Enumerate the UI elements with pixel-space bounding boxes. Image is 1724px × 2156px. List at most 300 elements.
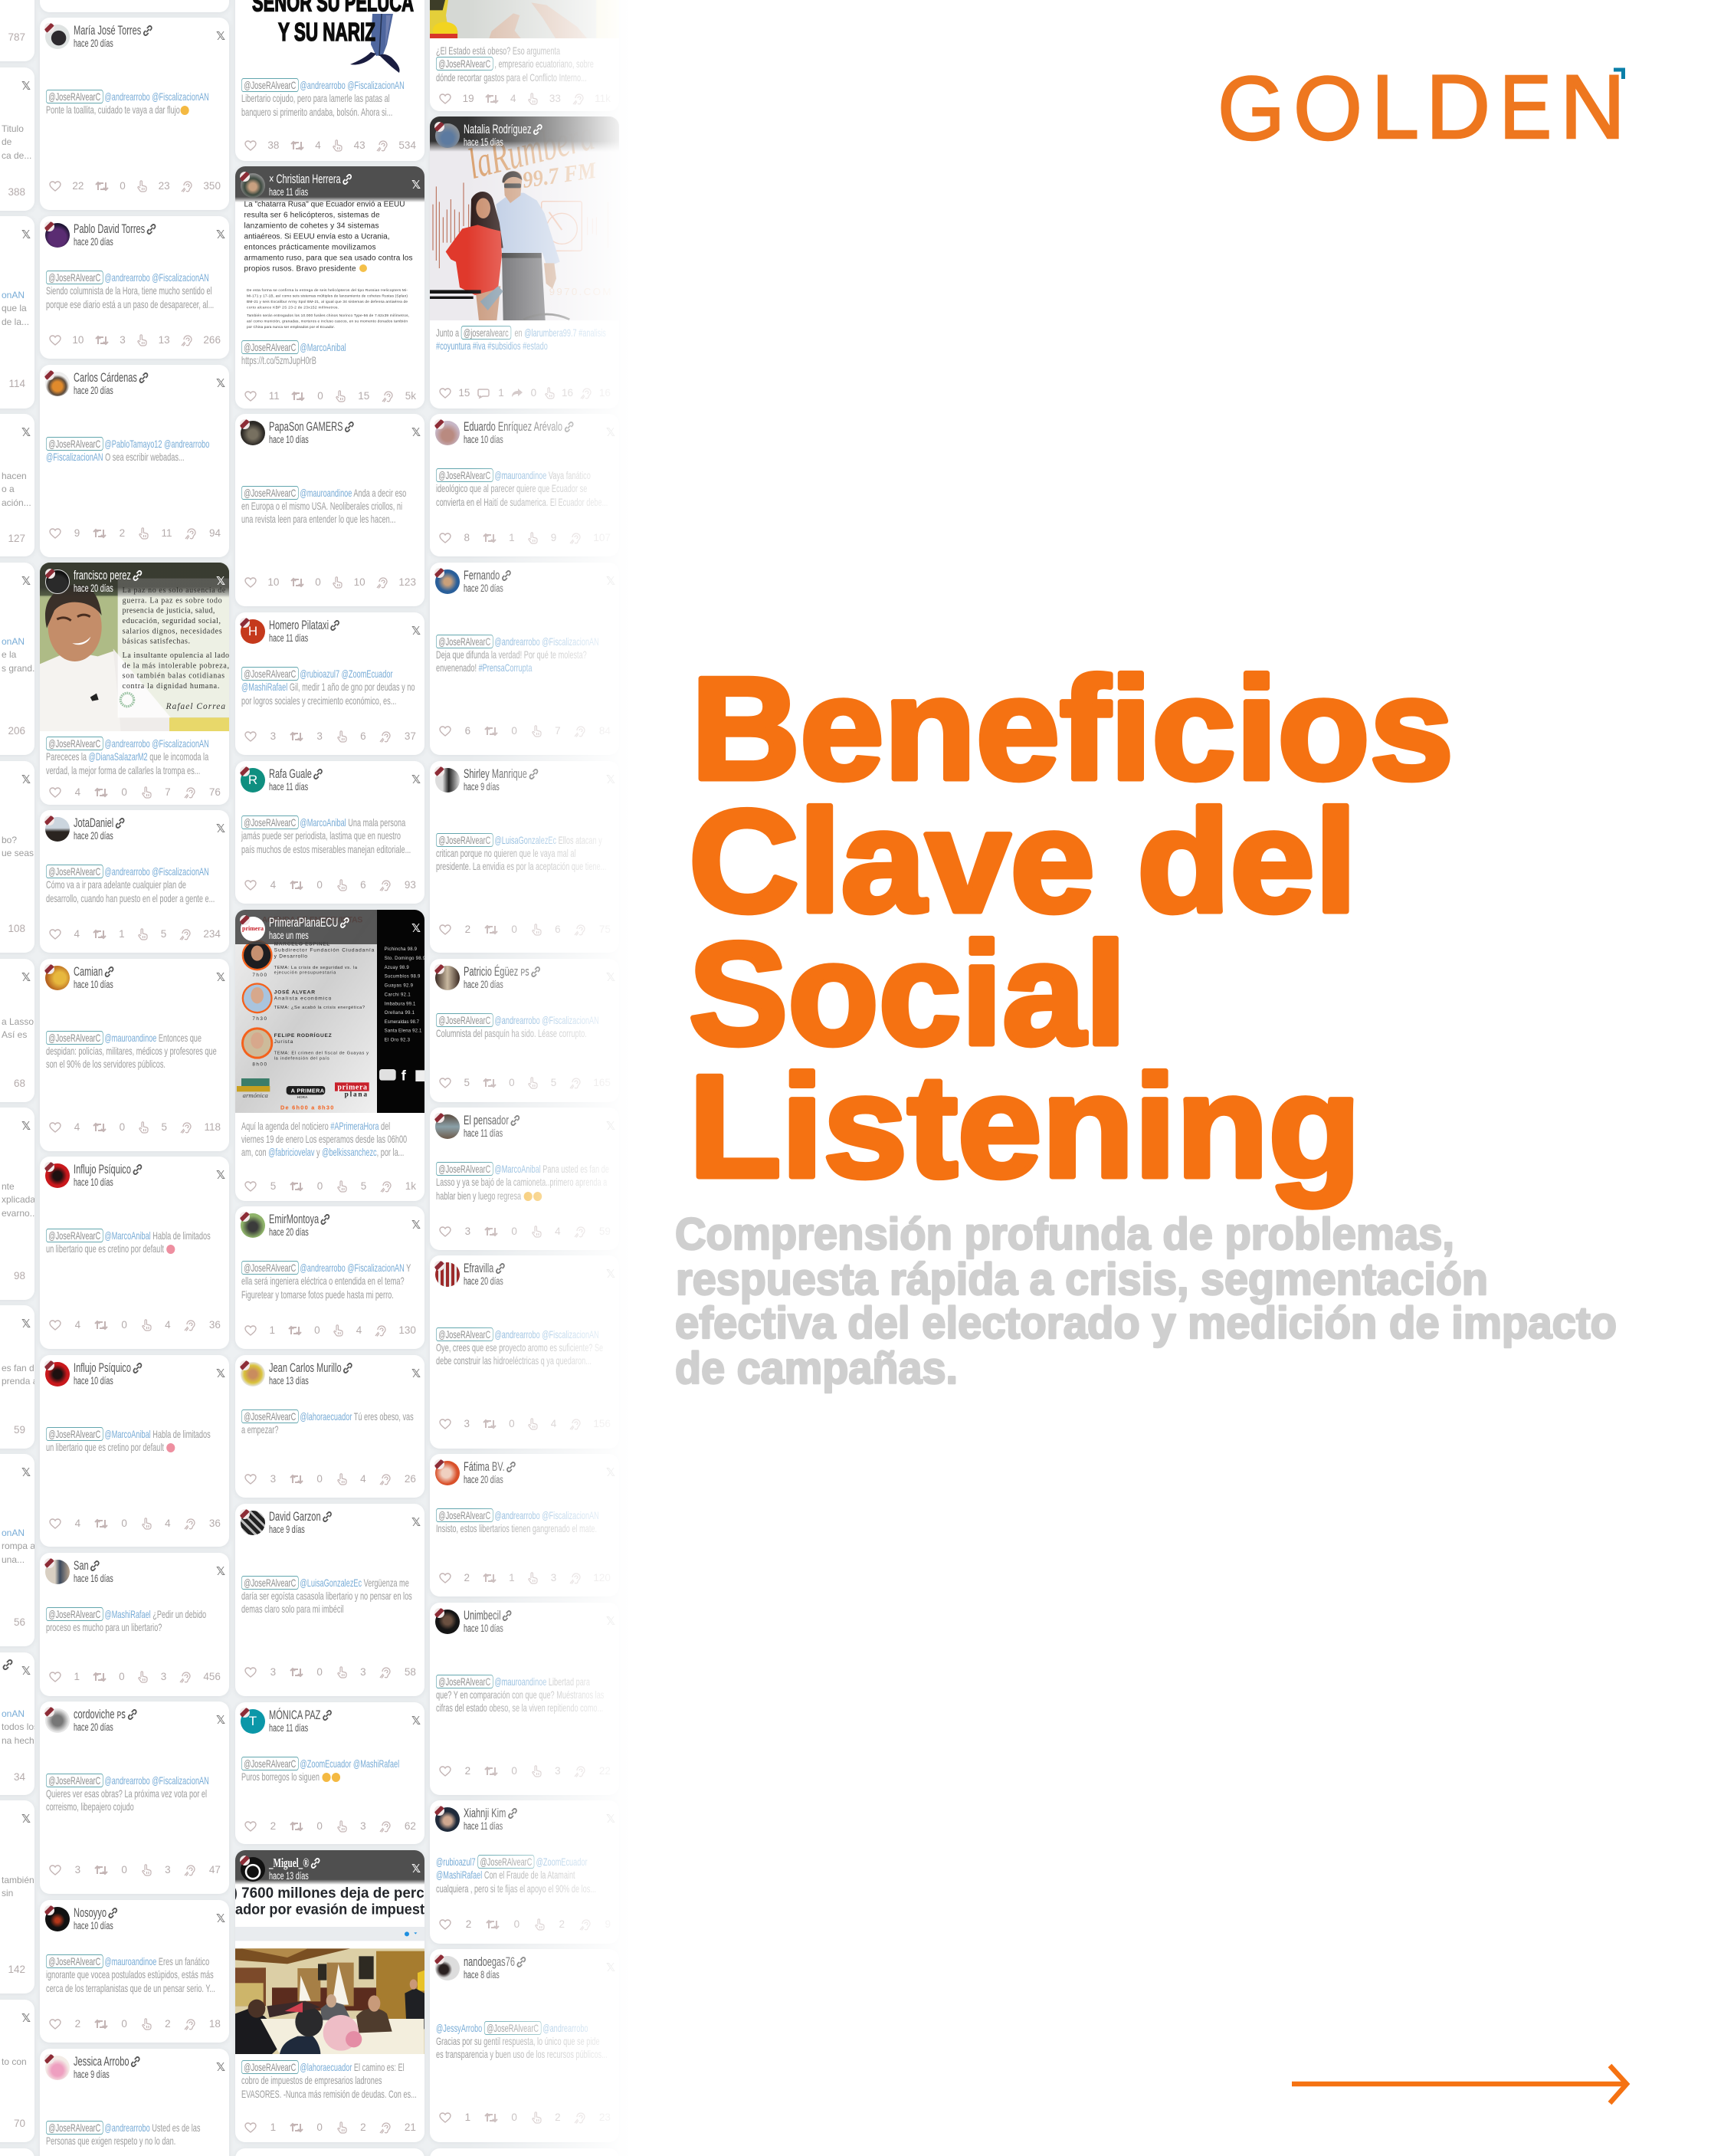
- tweet text: cobro de impuestos de empresarios ladrones: [241, 2074, 382, 2086]
- tweet text: @MashiRafael Gil, medir 1 año de gno por deudas y no: [241, 681, 415, 693]
- engagement stats: 22: [599, 1765, 611, 1777]
- tweet: Pablo David Torres: [40, 216, 229, 359]
- avatar: [435, 1610, 460, 1634]
- avatar: [45, 569, 70, 594]
- screenshot text: Mi-171 y 17-1B, así como seis sistemas múltiples de lanzamiento de cohetes Rustas (Splan): [247, 294, 408, 299]
- column A card: cropped tweet 127: [0, 414, 34, 556]
- X icon: 𝕏: [606, 1465, 615, 1479]
- tweet text: banquero si primerito andaba, bolsón. Ahora si...: [241, 106, 392, 118]
- author: [74, 569, 143, 594]
- engagement stats: 2: [466, 1918, 471, 1930]
- column A card: cropped tweet 787: 787: [8, 31, 25, 43]
- engagement stats: 11: [162, 527, 172, 539]
- avatar: [45, 1708, 70, 1733]
- engagement stats: 5: [270, 1180, 276, 1191]
- engagement stats: [439, 1077, 611, 1089]
- author: hace 10 días: [464, 1623, 503, 1634]
- author: hace 20 días: [269, 1226, 309, 1238]
- engagement stats: [49, 1319, 221, 1331]
- X icon: 𝕏: [216, 1564, 225, 1578]
- column A card: cropped tweet 206: 𝕏: [21, 574, 31, 588]
- tweet text: convierta en el Haití de sudamerica. El Ecuador debe...: [435, 496, 608, 508]
- agenda poster: [235, 909, 424, 1113]
- author: Carlos Cárdenas: [74, 371, 137, 385]
- X icon: 𝕏: [411, 1714, 421, 1728]
- tweet text: @FiscalizacionAN O sea escribir webadas...: [46, 451, 184, 463]
- engagement stats: 22: [72, 180, 84, 192]
- tweet text: desarrollo, cuando han puesto en el poder a gente e...: [46, 892, 215, 904]
- engagement stats: 36: [209, 1319, 221, 1331]
- engagement stats: 3: [120, 334, 126, 346]
- author: EmirMontoya: [269, 1213, 319, 1226]
- tweet text: @JoseRAlvearC @mauroandinoe Libertad para: [438, 1675, 589, 1688]
- engagement stats: [244, 2122, 416, 2134]
- X icon: 𝕏: [411, 773, 421, 786]
- author: JotaDaniel: [74, 816, 113, 830]
- tweet: EmirMontoya: [235, 1206, 424, 1349]
- agenda poster: MARCELO ESPINEL: [274, 941, 329, 947]
- tweet text: es transparencia y buen uso de los recursos públicos...: [435, 2048, 607, 2060]
- avatar: [435, 768, 460, 793]
- agenda poster: A PRIMERA: [291, 1087, 325, 1094]
- engagement stats: 1: [498, 387, 504, 399]
- video still: [430, 0, 619, 38]
- tweet text: Ponte la toallita, cuidado te vaya a dar flujo: [46, 103, 179, 116]
- logo: GOLDEN: N: [1560, 57, 1625, 158]
- column A card: cropped tweet 108: bo?: [2, 835, 17, 845]
- logo: GOLDEN: G: [1218, 58, 1285, 159]
- engagement stats: [439, 2112, 611, 2124]
- column A card: cropped tweet 68: 68: [14, 1078, 25, 1089]
- screenshot text: lanzamiento de cohetes y 34 sistemas: [244, 222, 379, 230]
- screenshot text: De esta forma se confirma la entrega de seis helicópteros del tipo Russian Helicopters Mi-: [247, 288, 408, 293]
- tweet with photo: Natalia Rodríguez: [430, 116, 619, 409]
- engagement stats: 11: [269, 390, 280, 402]
- X icon: 𝕏: [606, 1812, 615, 1826]
- tweet text: @JoseRAlvearC @andrearrobo @FiscalizacionAN: [438, 1509, 598, 1521]
- column A card: cropped tweet 68: 𝕏: [21, 970, 31, 984]
- tweet: Jean Carlos Murillo: [235, 1355, 424, 1498]
- column A card: cropped tweet 142: 142: [8, 1964, 25, 1975]
- tweet: Xiahnji Kim: [430, 1800, 619, 1944]
- author: [464, 1955, 526, 1980]
- tweet text: debe construir las hidroeléctricas q ya quedaron...: [435, 1354, 591, 1367]
- tweet text: [435, 1856, 595, 1895]
- author: [464, 569, 511, 594]
- engagement stats: 0: [121, 1864, 127, 1875]
- column A card: cropped tweet 206: e la: [2, 649, 16, 660]
- agenda poster: f: [402, 1067, 407, 1083]
- engagement stats: 94: [209, 527, 221, 539]
- agenda poster: Imbabura 99.1: [385, 1002, 416, 1006]
- tweet text: cifras del estado obeso, se la viven repitiendo como...: [435, 1702, 603, 1714]
- engagement stats: 26: [405, 1473, 416, 1485]
- column A card: cropped tweet 127: 127: [8, 533, 25, 544]
- X icon: 𝕏: [411, 1515, 421, 1529]
- avatar: [241, 1362, 265, 1386]
- column A card: cropped tweet 142: también: [2, 1875, 34, 1885]
- engagement stats: 62: [405, 1820, 416, 1832]
- column A card: cropped tweet 56: 56: [14, 1616, 25, 1628]
- engagement stats: 11k: [595, 93, 611, 104]
- author: hace un mes: [269, 929, 309, 941]
- tweet text: [46, 2121, 201, 2147]
- author: [464, 420, 574, 445]
- tweet text: Columnista del pasquín ha sido. Léase corrupto.: [435, 1027, 586, 1039]
- column A card: cropped tweet 388: [0, 67, 34, 210]
- author: hace 20 días: [74, 830, 113, 842]
- tweet: Fernando: [430, 563, 619, 755]
- column A card: cropped tweet 70: [0, 2000, 34, 2142]
- tweet text: Figuretear y tomarse fotos puede hasta mi perro.: [241, 1288, 393, 1301]
- engagement stats: 4: [74, 928, 80, 940]
- tweet text: ¿El Estado está obeso? Eso argumenta: [435, 44, 560, 57]
- agenda poster: Santa Elena 92.1: [385, 1029, 422, 1033]
- column A card: cropped tweet 388: 388: [8, 186, 25, 198]
- author: Unimbecil: [464, 1609, 501, 1623]
- column A card: cropped tweet 56: una...: [2, 1554, 25, 1565]
- tweet: Carlos Cárdenas: [40, 365, 229, 557]
- engagement stats: 9: [74, 527, 80, 539]
- tweet: Unimbecil: [430, 1603, 619, 1795]
- engagement stats: 0: [511, 924, 517, 935]
- engagement stats: 38: [267, 139, 279, 151]
- tweet text: [435, 635, 598, 674]
- tweet text: [241, 1410, 413, 1437]
- agenda poster: Jurista: [274, 1039, 293, 1044]
- author: [269, 915, 349, 941]
- author: Patricio Égüez ᴘꜱ: [464, 965, 529, 979]
- avatar: primera: [242, 924, 264, 932]
- author: × Christian Herrera: [269, 172, 341, 186]
- author: hace 20 días: [74, 385, 113, 396]
- engagement stats: 4: [360, 1473, 366, 1485]
- engagement stats: 3: [316, 730, 323, 742]
- tweet text: @JoseRAlvearC @andrearrobo @FiscalizacionAN: [438, 1014, 598, 1026]
- author: hace 10 días: [74, 979, 113, 990]
- engagement stats: 13: [159, 334, 170, 346]
- photo: Rafael Correa quote: La insultante opulencia al lado: [123, 651, 229, 660]
- author: hace 20 días: [74, 38, 113, 49]
- engagement stats: 4: [75, 1518, 80, 1529]
- engagement stats: 1: [509, 532, 515, 543]
- engagement stats: [244, 1180, 416, 1193]
- tweet text: @JoseRAlvearC @MarcoAnibal Habla de limitados: [48, 1229, 210, 1242]
- photo: Rafael Correa quote: básicas satisfechas.: [123, 638, 190, 646]
- subtitle: de campañas.: [675, 1344, 958, 1393]
- engagement stats: 2: [75, 2018, 80, 2030]
- engagement stats: 0: [121, 1518, 127, 1529]
- author: PrimeraPlanaECU: [269, 915, 338, 929]
- agenda poster: HORA: [297, 1094, 308, 1099]
- screenshot text: [244, 201, 412, 330]
- engagement stats: 15: [358, 390, 369, 402]
- engagement stats: 3: [270, 730, 276, 742]
- engagement stats: 76: [209, 786, 221, 798]
- engagement stats: [244, 139, 416, 152]
- tweet: David Garzon: [235, 1504, 424, 1696]
- engagement stats: 9: [551, 532, 556, 543]
- column A card: cropped tweet 787: [0, 0, 34, 61]
- avatar: [241, 768, 265, 793]
- avatar: R: [248, 773, 257, 787]
- X icon: 𝕏: [216, 1713, 225, 1727]
- tweet text: @JessyArrobo @JoseRAlvearC @andrearrobo: [435, 2022, 588, 2034]
- arrow: [1292, 2066, 1627, 2103]
- engagement stats: 3: [75, 1864, 80, 1875]
- tweet text: Oye, crees que ese proyecto aromo es suficiente? Se: [435, 1341, 603, 1354]
- engagement stats: 0: [511, 2112, 517, 2123]
- avatar: [241, 1511, 265, 1535]
- agenda poster: Guayas 92.9: [385, 983, 414, 988]
- avatar: [435, 421, 460, 445]
- engagement stats: 165: [593, 1077, 611, 1088]
- X icon: 𝕏: [216, 2060, 225, 2074]
- column A card: cropped tweet 59: 𝕏: [21, 1317, 31, 1331]
- column D card: cut off at bottom: [430, 2148, 619, 2156]
- tweet text: cerca de los terraplanistas que de un pensar serio. Y...: [46, 1982, 215, 1994]
- engagement stats: [244, 879, 416, 891]
- engagement stats: 10: [267, 576, 279, 588]
- author: El pensador: [464, 1114, 509, 1127]
- avatar: [435, 1807, 460, 1832]
- author: [74, 1163, 143, 1188]
- engagement stats: 2: [165, 2018, 171, 2030]
- agenda poster: ejecución presupuestaria: [274, 970, 336, 975]
- X icon: 𝕏: [216, 574, 225, 588]
- column A card: cropped tweet 142: [0, 1800, 34, 1994]
- engagement stats: [49, 1121, 221, 1134]
- agenda poster: De 6h00 a 8h30: [280, 1104, 333, 1111]
- screenshot text: resulta ser 6 helicópteros, sistemas de: [244, 212, 380, 219]
- avatar: [241, 1213, 265, 1238]
- engagement stats: 0: [317, 1180, 323, 1191]
- author: hace 11 días: [269, 632, 308, 644]
- X icon: 𝕏: [411, 1862, 421, 1875]
- engagement stats: [439, 93, 611, 105]
- column A card: cropped tweet 114: [0, 216, 34, 409]
- avatar: [45, 817, 70, 842]
- author: hace 8 días: [464, 1969, 500, 1980]
- author: PapaSon GAMERS: [269, 420, 343, 434]
- avatar: [45, 1560, 70, 1584]
- column A card: cropped tweet 34: onAN: [2, 1708, 25, 1719]
- tweet: Rafa Guale: [235, 761, 424, 904]
- engagement stats: [244, 390, 416, 402]
- avatar: [241, 917, 265, 941]
- author: [74, 2055, 140, 2080]
- photo: Rafael Correa quote: educación, seguridad social,: [123, 617, 221, 625]
- column A card: cropped tweet 114: 114: [8, 378, 25, 389]
- tweet text: [435, 1163, 608, 1203]
- author: San: [74, 1559, 89, 1573]
- author: Influjo Psíquico: [74, 1163, 131, 1176]
- author: hace 20 días: [74, 1721, 113, 1733]
- tweet text: @JoseRAlvearC @andrearrobo @FiscalizacionAN: [244, 79, 404, 91]
- column A card: cropped tweet 206: onAN: [2, 636, 25, 647]
- tweet text: [46, 1954, 215, 1994]
- logo: GOLDEN: D: [1426, 57, 1490, 158]
- author: Influjo Psíquico: [74, 1361, 131, 1375]
- screenshot text: corto alcance KBP 2S 23-2 de 23x152 milímetros.: [247, 305, 339, 310]
- tweet text: [241, 78, 404, 118]
- screenshot text: La "chatarra Rusa" que Ecuador envió a EEUU: [244, 201, 405, 208]
- tweet text: @JoseRAlvearC @mauroandinoe Entonces que: [48, 1032, 202, 1044]
- author: [464, 1807, 517, 1832]
- agenda poster: primera: [337, 1083, 367, 1091]
- tweet text: @JoseRAlvearC @andrearrobo @FiscalizacionAN: [48, 90, 208, 103]
- tweet: Fátima BV.: [430, 1454, 619, 1596]
- column A card: cropped tweet 388: ca de...: [2, 150, 31, 161]
- column A card: cropped tweet 59: [0, 1305, 34, 1449]
- author: [74, 816, 124, 842]
- engagement stats: [49, 1864, 221, 1876]
- author: [464, 965, 541, 990]
- tweet: El pensador: [430, 1108, 619, 1250]
- tweet text: @JoseRAlvearC @LuisaGonzalezEc Vergüenza me: [244, 1576, 408, 1588]
- avatar: [241, 173, 265, 198]
- tweet text: dónde recortar gastos para el Conflicto Interno...: [435, 71, 586, 84]
- agenda poster: Carchi 92.1: [385, 993, 411, 997]
- engagement stats: 7: [555, 725, 561, 737]
- engagement stats: 0: [316, 1820, 323, 1832]
- title: Social: [689, 913, 1126, 1075]
- column A card: cropped tweet 127: hacen: [2, 471, 27, 481]
- title: Listening: [689, 1045, 1361, 1208]
- avatar: [435, 966, 460, 990]
- X icon: 𝕏: [411, 425, 421, 439]
- column A card: cropped tweet 142: 𝕏: [21, 1812, 31, 1826]
- screenshot text: antiaéreos. Si EEUU envía esto a Ucrania,: [244, 233, 389, 241]
- X icon: 𝕏: [411, 921, 421, 935]
- engagement stats: 4: [270, 879, 276, 891]
- author: Shirley Manrique: [464, 767, 527, 781]
- header band: [235, 1850, 424, 1885]
- engagement stats: 2: [120, 527, 125, 539]
- column A card: cropped tweet 34: 34: [14, 1771, 25, 1783]
- engagement stats: 130: [398, 1324, 416, 1336]
- engagement stats: 43: [354, 139, 365, 151]
- logo: GOLDEN: [1218, 57, 1625, 159]
- author: Nosoyyo: [74, 1906, 107, 1920]
- tweet: María José Torres: [40, 18, 229, 210]
- author: hace 11 días: [269, 186, 308, 198]
- tweet text: [241, 1262, 411, 1301]
- tweet text: @JoseRAlvearC @mauroandinoe Eres un fanático: [48, 1955, 209, 1967]
- author: hace 13 días: [269, 1375, 309, 1386]
- tweet text: viernes 19 de enero Los esperamos desde las 06h00: [241, 1133, 407, 1145]
- engagement stats: [439, 387, 611, 399]
- engagement stats: 5k: [405, 390, 416, 402]
- agenda poster: JOSÉ ALVEAR: [274, 988, 315, 995]
- column A card: cropped tweet 56: rompa a: [2, 1541, 34, 1551]
- tweet text: cualquiera , pero si te fijas el apoyo el 90% de los...: [435, 1882, 595, 1895]
- photo: Rafael Correa quote: [40, 563, 229, 731]
- engagement stats: [49, 527, 221, 540]
- author: hace 9 días: [269, 1524, 305, 1535]
- screenshot text: También serán entregados los 10.000 fusiles chinos Norinco Type-56 de 7.62x39 milímetros,: [247, 313, 409, 318]
- title: [689, 648, 1454, 1208]
- agenda poster: AGENDA DE ENTREVISTAS: [262, 915, 362, 924]
- engagement stats: 19: [463, 93, 474, 104]
- author: [269, 1361, 352, 1386]
- X icon: 𝕏: [216, 1367, 225, 1380]
- tweet text: [46, 1427, 210, 1453]
- X icon: 𝕏: [606, 1961, 615, 1974]
- tweet: Jessica Arrobo: [40, 2049, 229, 2156]
- subtitle: Comprensión profunda de problemas,: [675, 1209, 1454, 1259]
- tweet text: Siendo columnista de la Hora, tiene mucho sentido el: [46, 284, 211, 297]
- agenda poster: y Desarrollo: [274, 953, 307, 959]
- engagement stats: 0: [317, 390, 323, 402]
- tweet text: @JoseRAlvearC @andrearrobo @FiscalizacionAN: [48, 1774, 208, 1786]
- engagement stats: 4: [75, 1319, 80, 1331]
- tweet: nandoegas76: [430, 1949, 619, 2142]
- author: hace 20 días: [74, 582, 113, 594]
- engagement stats: 120: [593, 1572, 611, 1583]
- engagement stats: 0: [314, 1324, 320, 1336]
- column A card: cropped tweet 127: ación...: [2, 497, 31, 508]
- engagement stats: [244, 1666, 416, 1679]
- engagement stats: 0: [509, 1418, 515, 1429]
- X icon: 𝕏: [606, 1614, 615, 1628]
- X icon: 𝕏: [411, 1218, 421, 1232]
- screenshot text: por China para nunca ser empleados por el Ecuador.: [247, 325, 335, 330]
- tweet: Shirley Manrique: [430, 761, 619, 953]
- tweet text: [46, 1229, 210, 1255]
- tweet text: [241, 2061, 416, 2101]
- author: Jessica Arrobo: [74, 2055, 129, 2069]
- engagement stats: 37: [405, 730, 416, 742]
- photo: Rafael Correa quote: de la más intolerable pobreza,: [123, 661, 229, 670]
- header band: [235, 166, 424, 202]
- agenda poster: Pichincha 98.9: [385, 947, 418, 952]
- column A card: cropped tweet 56: 𝕏: [21, 1465, 31, 1479]
- column A card: cropped tweet 108: ue seas: [2, 848, 34, 858]
- engagement stats: [49, 928, 221, 940]
- engagement stats: 0: [121, 786, 127, 798]
- engagement stats: 1: [270, 2122, 276, 2133]
- engagement stats: 3: [165, 1864, 171, 1875]
- author: hace 9 días: [464, 781, 500, 793]
- engagement stats: [49, 1518, 221, 1530]
- engagement stats: [439, 924, 611, 936]
- tweet text: [241, 1576, 411, 1616]
- tweet text: @JoseRAlvearC @MarcoAnibal: [244, 341, 346, 353]
- engagement stats: 0: [316, 2122, 323, 2133]
- engagement stats: 4: [356, 1324, 362, 1336]
- engagement stats: 1k: [405, 1180, 416, 1191]
- tweet text: Lasso y ya se bajó de la camioneta..primero aprenda a: [435, 1176, 607, 1188]
- screenshot text: propios rusos. Bravo presidente: [244, 265, 356, 273]
- author: [269, 1856, 320, 1882]
- engagement stats: 47: [209, 1864, 221, 1875]
- engagement stats: 3: [464, 1418, 470, 1429]
- X icon: 𝕏: [411, 624, 421, 638]
- news screenshot and photo: [235, 1850, 424, 2054]
- tweet text: ignorante que vocea postulados estúpidos, estás más: [46, 1968, 213, 1980]
- column A card: cropped tweet 70: to con: [2, 2056, 27, 2067]
- engagement stats: 6: [555, 924, 561, 935]
- author: hace 10 días: [74, 1920, 113, 1931]
- tweet text: @JoseRAlvearC @PabloTamayo12 @andrearrobo: [48, 437, 209, 449]
- engagement stats: 2: [559, 1918, 565, 1930]
- engagement stats: 3: [360, 1820, 366, 1832]
- author: [74, 24, 152, 49]
- column A card: cropped tweet 98: 𝕏: [21, 1119, 31, 1133]
- tweet: San: [40, 1553, 229, 1696]
- engagement stats: 4: [555, 1226, 561, 1237]
